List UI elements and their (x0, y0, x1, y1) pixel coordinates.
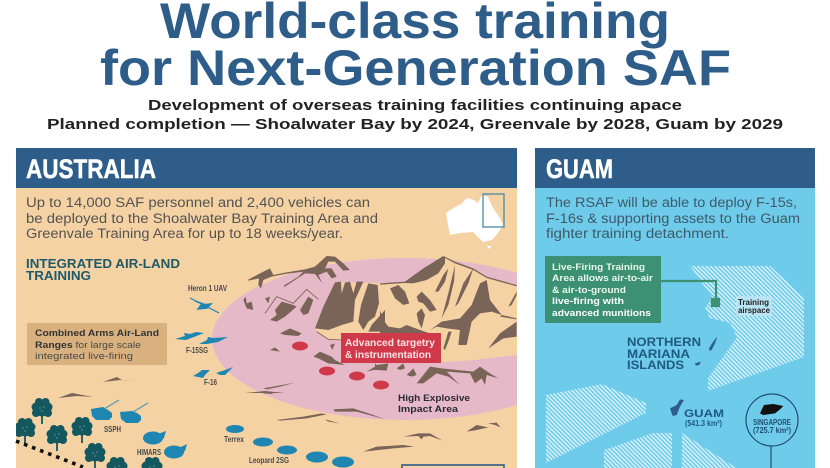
title (100, 0, 731, 96)
Guam intro text: F-16s & supporting assets to the Guam (546, 211, 800, 226)
Guam intro text: fighter training detachment. (546, 226, 729, 241)
callout: advanced targetry (341, 333, 441, 363)
icon: Guam island (670, 399, 684, 416)
panel: Guam (535, 148, 815, 468)
label: training airspace (736, 296, 772, 316)
callout: live-firing training area: advanced munitions (552, 308, 651, 319)
Singapore comparison circle (746, 394, 798, 468)
Australia intro text: Up to 14,000 SAF personnel and 2,400 vehicles can (26, 195, 370, 210)
heading: integrated air-land training (26, 257, 180, 283)
F-16 jets (193, 367, 233, 387)
Australia header: AUSTRALIA (26, 154, 156, 184)
label: northern mariana islands: NORTHERN (627, 335, 701, 349)
heading: integrated air-land training: TRAINING (26, 269, 91, 283)
label: northern mariana islands (627, 335, 701, 372)
callout: combined arms ranges: integrated live-firing (35, 351, 133, 362)
callout: combined arms ranges: Combined Arms Air-Land (35, 328, 159, 339)
callout: live-firing training area: live-firing with (552, 296, 624, 307)
HIMARS launchers (137, 431, 187, 458)
label: northern mariana islands: MARIANA (627, 347, 690, 361)
callout: live-firing training area (545, 256, 661, 323)
label: Guam: (541.3 km²) (685, 418, 722, 428)
HIMARS launchers: HIMARS (137, 447, 161, 457)
red targets (292, 342, 389, 390)
legend box (402, 465, 504, 468)
label: northern mariana islands: ISLANDS (627, 358, 684, 372)
subtitle (47, 97, 783, 133)
connector to training area (661, 281, 719, 306)
high explosive impact zone (212, 256, 517, 452)
Singapore comparison circle: (725.7 km²) (753, 426, 791, 435)
trees (14, 398, 162, 468)
label: Guam: GUAM (684, 408, 724, 420)
Australia intro text: Greenvale Training Area for up to 18 weeks/year. (26, 226, 343, 241)
subtitle: Planned completion — Shoalwater Bay by 2024, Greenvale by 2028, Guam by 2029 (47, 116, 783, 133)
icon: northern mariana islands (695, 337, 717, 366)
callout: combined arms ranges: Ranges for large scale (35, 340, 141, 351)
callout: live-firing training area: Live-Firing Training (552, 262, 645, 273)
Guam intro text (546, 195, 800, 241)
callout: live-firing training area: & air-to-ground (552, 285, 626, 296)
Guam intro text: The RSAF will be able to deploy F-15s, (546, 195, 797, 210)
Heron UAV: Heron 1 UAV (188, 283, 227, 293)
Terrex vehicle (224, 425, 244, 444)
dotted boundary line (16, 441, 83, 467)
Terrex vehicle: Terrex (224, 434, 244, 444)
callout: advanced targetry: Advanced targetry (345, 338, 435, 349)
title: for Next-Generation SAF (100, 40, 731, 96)
Australia intro text (26, 195, 378, 241)
F-15SG jets: F-15SG (186, 345, 208, 355)
heading: integrated air-land training: INTEGRATED AIR-LAND (26, 257, 180, 271)
Guam header (535, 148, 815, 188)
Australia intro text: be deployed to the Shoalwater Bay Training Area and (26, 211, 378, 226)
ground ridges (58, 377, 285, 398)
label: training airspace: airspace (738, 305, 770, 315)
F-16 jets: F-16 (204, 377, 217, 387)
subtitle: Development of overseas training facilities continuing apace (148, 97, 682, 114)
label: high explosive impact area: Impact Area (398, 404, 459, 415)
panel: Australia (15, 148, 517, 468)
callout: live-firing training area: Area allows air-to-air (552, 273, 653, 284)
label: Guam (684, 408, 724, 428)
Guam header: GUAM (546, 154, 613, 184)
icon: Australia map (446, 194, 504, 249)
SSPH artillery (91, 400, 148, 434)
Heron UAV (188, 283, 227, 313)
F-15SG jets (175, 332, 228, 355)
Australia header (16, 148, 517, 188)
Leopard 2SG tanks (249, 438, 354, 468)
label: training airspace: Training (738, 297, 769, 307)
callout: combined arms ranges (27, 323, 167, 365)
Leopard 2SG tanks: Leopard 2SG (249, 455, 289, 465)
Singapore comparison circle: SINGAPORE (753, 418, 792, 427)
SSPH artillery: SSPH (104, 424, 121, 434)
callout: advanced targetry: & instrumentation (345, 350, 431, 361)
label: high explosive impact area: High Explosive (398, 393, 470, 404)
mountain range (243, 256, 517, 452)
label: high explosive impact area (398, 393, 470, 415)
hatched training areas (546, 266, 804, 468)
